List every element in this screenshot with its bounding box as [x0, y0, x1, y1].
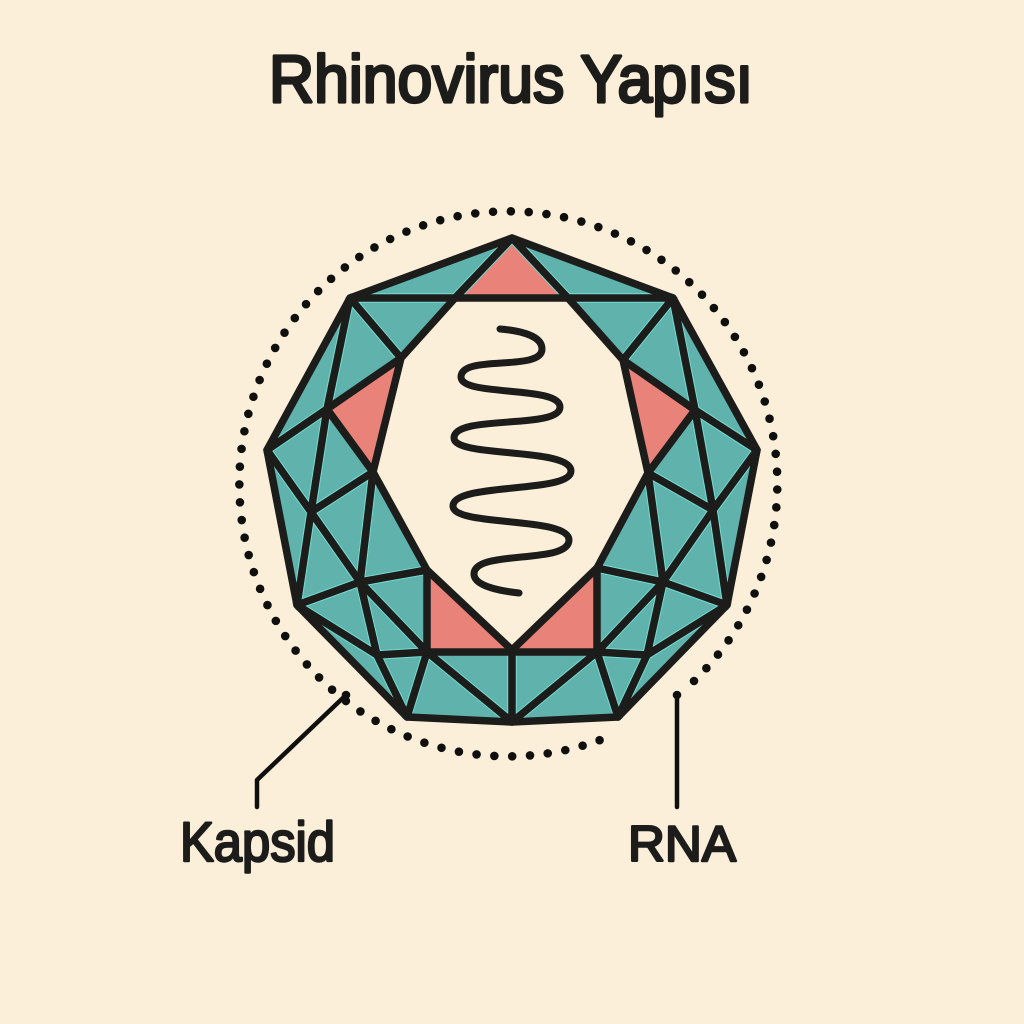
label: Kapsid: Kapsid — [180, 810, 335, 873]
capsid polyhedron — [267, 238, 757, 722]
capsid pink triangles — [327, 238, 695, 652]
capsid edge lines — [267, 238, 757, 722]
capsid teal ring — [267, 238, 757, 722]
leader line: RNA — [674, 692, 680, 807]
dotted outer envelope — [239, 211, 777, 756]
title: Rhinovirus Yapısı — [269, 42, 753, 117]
RNA strand — [453, 329, 571, 593]
capsid edge glow — [267, 238, 757, 722]
label: RNA: RNA — [628, 816, 737, 872]
leader line: Kapsid — [257, 692, 349, 807]
